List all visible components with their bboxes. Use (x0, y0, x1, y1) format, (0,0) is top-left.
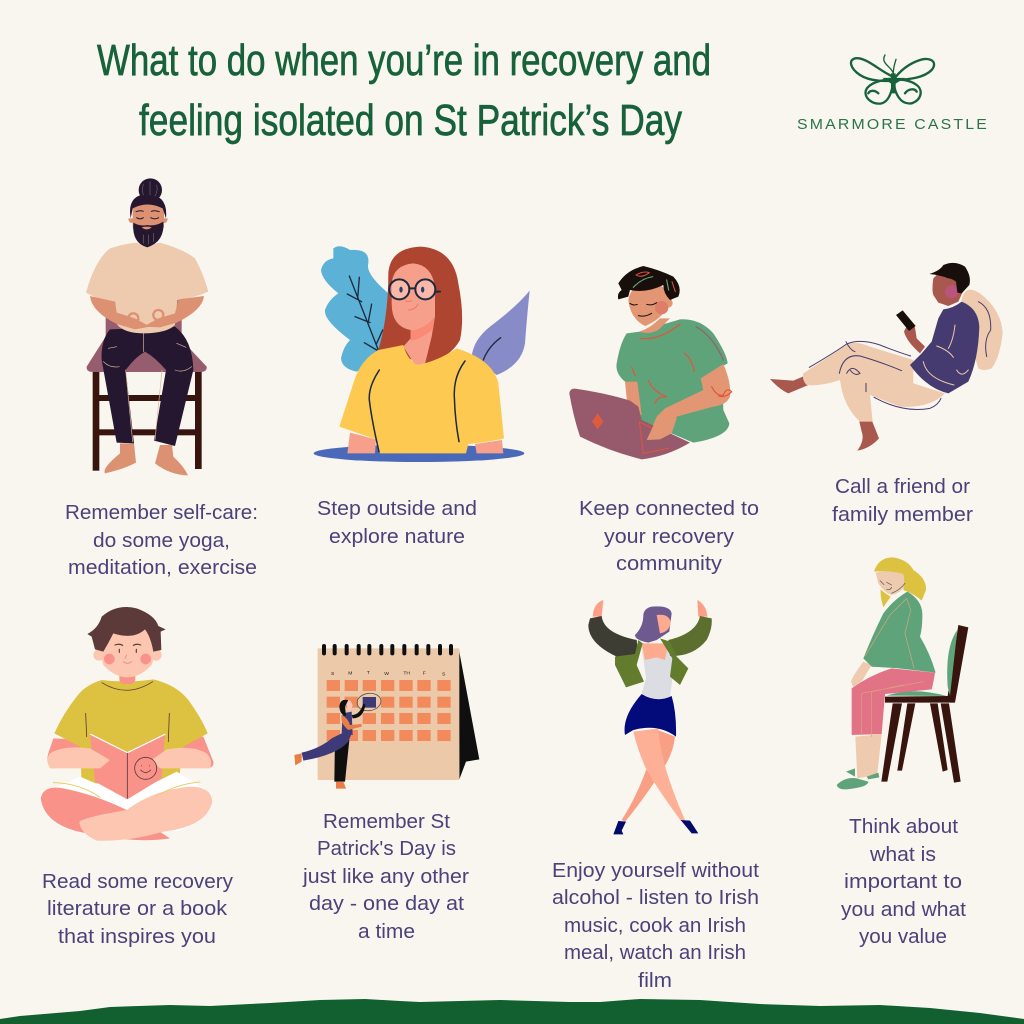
caption: explore nature (329, 526, 465, 548)
illustration: woman sitting on chair (837, 557, 968, 789)
caption: what is (869, 844, 936, 866)
caption: family member (832, 504, 973, 526)
panel: self-care tip (65, 178, 258, 579)
caption (579, 498, 759, 575)
panel: nature tip (314, 246, 530, 548)
illustration: calendar with woman: W (384, 671, 389, 677)
caption: community (616, 553, 722, 575)
caption: Step outside and (317, 498, 477, 520)
caption: a time (358, 921, 415, 943)
illustration: woman with glasses and leaves (314, 246, 530, 462)
title: feeling isolated on St Patrick’s Day (139, 96, 682, 145)
illustration: meditating man on chair (86, 178, 208, 475)
illustration: dancing woman (588, 600, 712, 834)
caption: just like any other (302, 866, 469, 888)
panel: one day at a time tip (294, 644, 479, 943)
illustration: calendar with woman: T (367, 670, 370, 676)
illustration: calendar with woman: S (442, 671, 446, 677)
caption (832, 476, 973, 526)
caption (317, 498, 477, 548)
caption (841, 816, 966, 948)
caption: Patrick's Day is (317, 838, 456, 860)
caption (552, 860, 759, 992)
footer: green hill (0, 999, 1024, 1024)
caption: do some yoga, (93, 530, 230, 552)
caption: Keep connected to (579, 498, 759, 520)
illustration: person with phone reclining (770, 263, 1003, 451)
logo: Smarmore Castle (797, 55, 989, 133)
panel: values tip (837, 557, 968, 948)
caption (65, 502, 258, 579)
title (97, 36, 711, 145)
caption (302, 811, 469, 943)
caption: day - one day at (309, 893, 464, 915)
panel: enjoy without alcohol tip (552, 600, 759, 992)
caption: you and what (841, 899, 966, 921)
caption: meditation, exercise (68, 557, 257, 579)
panel: community tip (569, 266, 759, 575)
illustration: calendar with woman: S (331, 671, 335, 677)
illustration: calendar with woman: M (348, 671, 352, 677)
caption: Read some recovery (42, 871, 233, 893)
caption: important to (844, 871, 962, 893)
caption: that inspires you (58, 926, 216, 948)
panel: reading tip (40, 607, 233, 948)
icon: butterfly (851, 55, 934, 104)
caption: Think about (849, 816, 958, 838)
panel: call a friend tip (770, 263, 1003, 526)
illustration: person at laptop (569, 266, 732, 459)
caption: you value (859, 926, 947, 948)
caption: meal, watch an Irish (564, 942, 746, 964)
illustration: calendar with woman: F (423, 671, 426, 677)
caption: Remember St (323, 811, 450, 833)
caption: Enjoy yourself without (552, 860, 759, 882)
caption: alcohol - listen to Irish (552, 887, 759, 909)
illustration: calendar with woman (294, 644, 479, 789)
logo wordmark: SMARMORE CASTLE (797, 117, 989, 133)
caption: music, cook an Irish (564, 915, 746, 937)
caption: film (638, 970, 672, 992)
illustration: calendar with woman: TH (403, 671, 410, 677)
caption: Remember self-care: (65, 502, 258, 524)
caption: your recovery (604, 526, 734, 548)
caption: literature or a book (47, 898, 228, 920)
caption (42, 871, 233, 948)
caption: Call a friend or (835, 476, 970, 498)
illustration: boy reading cross-legged (40, 607, 213, 841)
title: What to do when you’re in recovery and (97, 36, 711, 85)
